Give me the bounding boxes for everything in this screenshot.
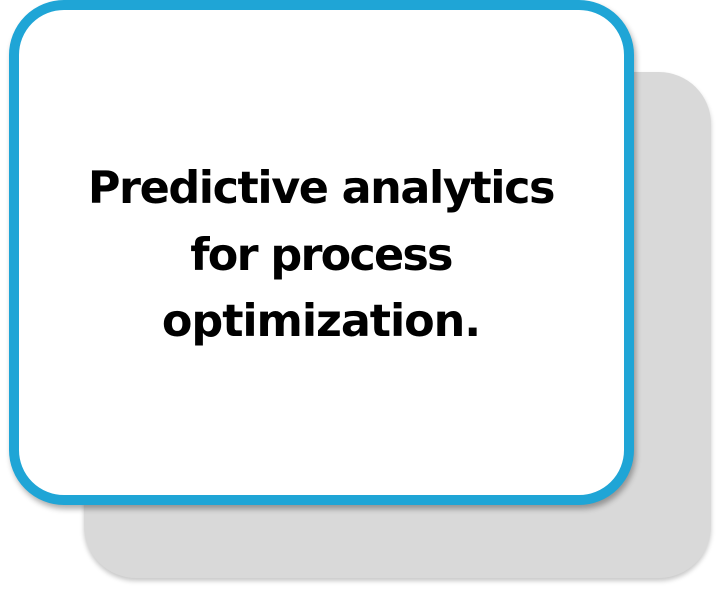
panel: grey offset backing card: [84, 72, 711, 578]
heading: predictive analytics text: [88, 163, 554, 347]
heading: predictive analytics text: optimization.: [162, 296, 480, 347]
heading: predictive analytics text: for process: [190, 230, 452, 280]
heading: predictive analytics text: Predictive analytics: [88, 163, 554, 214]
panel: white card with blue border: [9, 0, 634, 505]
